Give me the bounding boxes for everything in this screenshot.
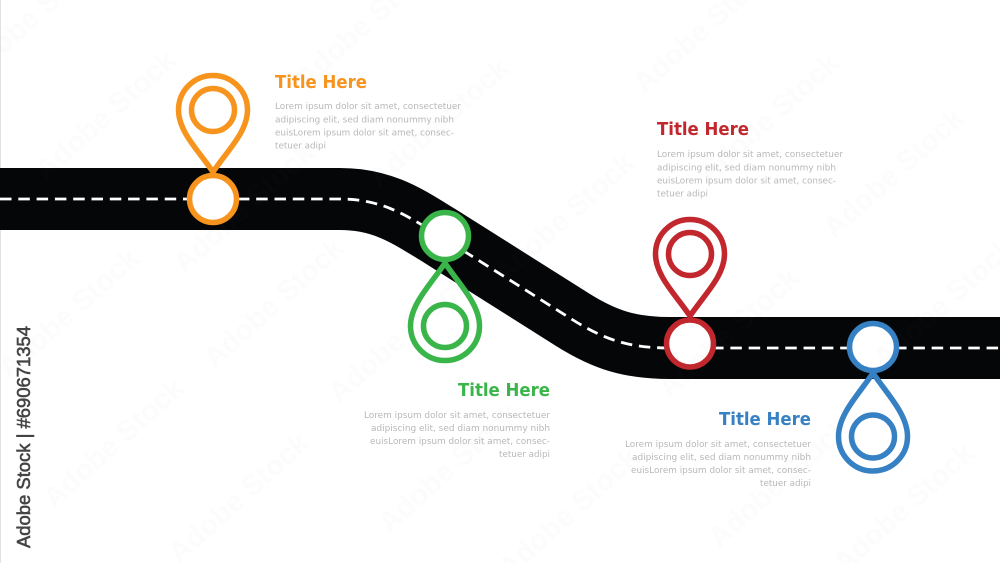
stock watermarks: Adobe Stock	[487, 147, 641, 290]
road	[0, 199, 1000, 348]
text block: orange: Lorem ipsum dolor sit amet, consectetuer	[275, 101, 461, 112]
text block: green: tetuer adipi	[499, 449, 550, 460]
text block: blue: euisLorem ipsum dolor sit amet, consec-	[631, 465, 811, 476]
text block: blue: tetuer adipi	[760, 478, 811, 489]
stock watermarks: Adobe Stock	[362, 52, 516, 195]
text block: green: euisLorem ipsum dolor sit amet, consec-	[370, 436, 550, 447]
text block: blue	[625, 409, 811, 489]
text block: red: Lorem ipsum dolor sit amet, consectetuer	[657, 149, 843, 160]
stock watermarks: Adobe Stock	[37, 372, 191, 515]
text block: red: Title Here	[657, 119, 749, 140]
text block: blue: Lorem ipsum dolor sit amet, consectetuer	[625, 439, 811, 450]
text block: green: Title Here	[458, 380, 550, 401]
stock watermarks: Adobe Stock	[29, 44, 183, 187]
text block: orange: tetuer adipi	[275, 140, 326, 152]
stock watermarks: Adobe Stock	[372, 397, 526, 540]
text block: blue: adipiscing elit, sed diam nonummy nibh	[632, 452, 811, 463]
pin: orange	[178, 76, 248, 222]
text block: red	[657, 119, 843, 200]
text block: blue: Title Here	[719, 409, 811, 430]
stock watermarks: Adobe Stock	[167, 137, 321, 280]
text block: red: tetuer adipi	[657, 188, 708, 200]
pin: blue	[838, 324, 908, 471]
stock watermarks: Adobe Stock	[652, 262, 806, 405]
stock id label: Adobe Stock | #690671354	[13, 326, 34, 548]
text block: orange: adipiscing elit, sed diam nonummy nibh	[275, 114, 454, 126]
text block: orange: Title Here	[275, 72, 367, 93]
text block: orange: euisLorem ipsum dolor sit amet, consec-	[275, 128, 454, 138]
text block: orange	[275, 72, 461, 152]
pin: red	[656, 220, 724, 367]
text block: green	[364, 380, 550, 460]
text block: green: adipiscing elit, sed diam nonummy nibh	[371, 423, 550, 434]
stock watermarks: Adobe Stock	[692, 47, 846, 190]
text block: red: adipiscing elit, sed diam nonummy nibh	[657, 162, 836, 174]
stock watermarks: Adobe Stock	[702, 412, 856, 555]
road centre dashed line	[0, 199, 1000, 348]
text block: green: Lorem ipsum dolor sit amet, consectetuer	[364, 410, 550, 421]
stock watermarks: Adobe Stock	[817, 102, 971, 245]
pin: green	[410, 212, 480, 361]
text block: red: euisLorem ipsum dolor sit amet, consec-	[657, 176, 836, 186]
stock watermarks: Adobe Stock	[197, 232, 351, 375]
stock watermarks: Adobe Stock	[322, 267, 476, 410]
